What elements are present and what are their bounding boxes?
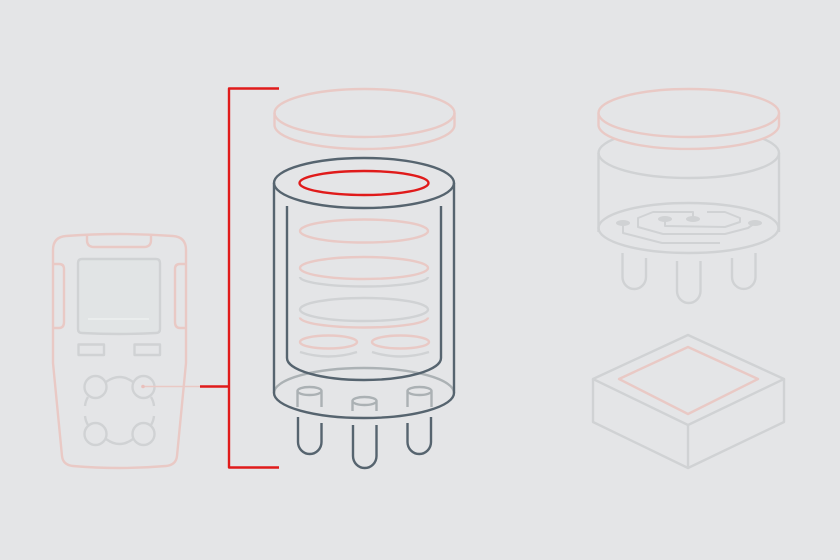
device right grip — [175, 264, 185, 328]
pink layer arc — [300, 318, 428, 328]
circuit traces — [616, 212, 762, 243]
red opening ring — [300, 171, 428, 195]
filter lid on assembled sensor — [598, 89, 779, 149]
pink diamond sensing surface — [619, 347, 758, 414]
pink membrane 2 — [300, 257, 428, 279]
faded pins — [622, 253, 756, 303]
small left gray arc — [300, 352, 357, 356]
gray electrode disc — [300, 298, 428, 321]
cylinder outer wall — [274, 183, 454, 418]
device left button — [78, 344, 104, 355]
cube top face — [593, 335, 784, 425]
device top notch — [87, 235, 151, 247]
small left pink disc — [300, 336, 357, 348]
small right pink disc — [372, 336, 429, 348]
exploded sensor: filter lid — [274, 89, 454, 149]
assembled sensor (faded) — [598, 89, 779, 303]
exploded sensor: main cylinder — [274, 158, 454, 418]
device left grip — [54, 264, 64, 328]
small right gray arc — [372, 352, 429, 356]
sensor chip cube (faded) — [593, 335, 784, 468]
exploded sensor: internal layers — [300, 220, 429, 356]
faded cylinder — [598, 153, 779, 232]
device: portable gas detector — [53, 234, 186, 468]
gray layer arc — [300, 277, 428, 286]
red bracket — [200, 88, 279, 468]
exploded sensor: base and pin tops — [274, 368, 454, 411]
device body outline — [53, 234, 186, 468]
device screen — [78, 259, 160, 334]
cube sides — [593, 379, 784, 468]
device sensor ports — [84, 376, 154, 445]
connector line from sensor port — [141, 385, 200, 388]
faded base plate — [598, 203, 778, 253]
cylinder inner wall — [287, 206, 441, 380]
faded cylinder top — [598, 128, 779, 178]
cylinder top rim — [274, 158, 454, 208]
exploded sensor: pins — [298, 417, 431, 468]
device right button — [134, 344, 160, 355]
pink membrane 1 — [300, 220, 428, 242]
